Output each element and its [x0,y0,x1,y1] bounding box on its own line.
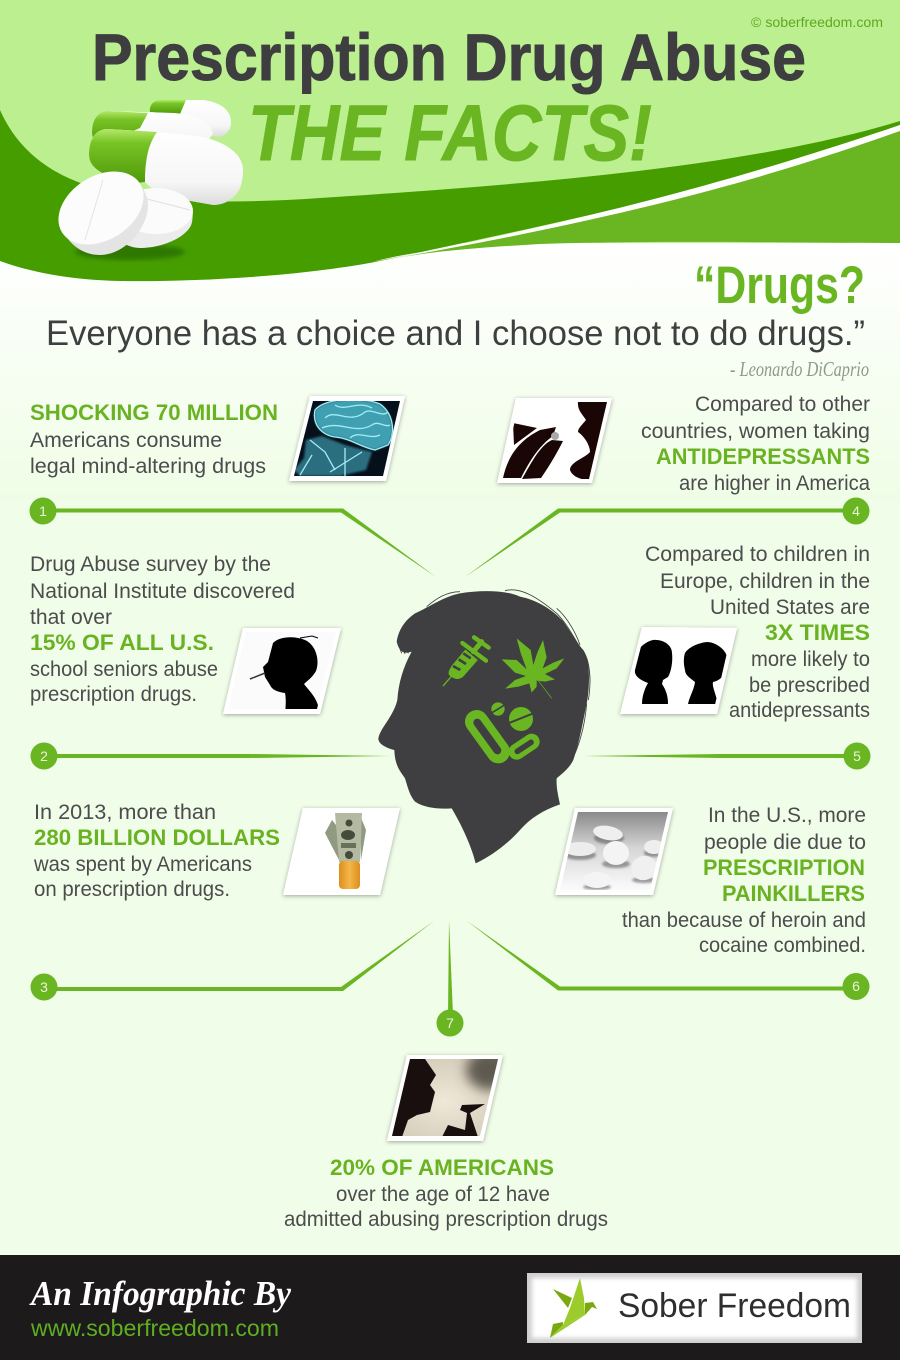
connector 1: 1 [39,503,47,519]
fact 2 text: 15% OF ALL U.S. [30,630,214,655]
fact 5 text: be prescribed [749,673,870,697]
fact 2 text: that over [30,605,112,629]
quote [46,256,869,381]
icon: capsules and tablets [477,702,533,752]
photo 2: teen smoking silhouette [223,628,343,715]
icon: pills [45,100,243,260]
fact 7 text: over the age of 12 have [336,1182,550,1206]
fact 4 text: ANTIDEPRESSANTS [656,444,870,469]
fact 3 text: 280 BILLION DOLLARS [34,825,280,850]
fact 5 text: 3X TIMES [765,620,870,645]
quote text: Everyone has a choice and I choose not to do drugs.” [46,314,865,353]
fact 7 text: 20% OF AMERICANS [330,1155,554,1180]
fact 1 text: legal mind-altering drugs [30,454,266,478]
connector 6: 6 [852,978,860,994]
connector 5: 5 [853,748,861,764]
icon: syringe [443,637,489,686]
connector 7 [436,920,464,1036]
fact 6 text: people die due to [704,830,866,854]
fact 1 text [30,400,278,478]
photo 5: children silhouettes [618,627,738,715]
fact 4 text: are higher in America [679,471,870,495]
connector 2: 2 [40,748,48,764]
footer heading: An Infographic By [29,1274,291,1313]
fact 4 text: countries, women taking [641,419,870,443]
connector 6 [467,921,870,1000]
tablets [75,188,193,260]
subtitle: the facts: THE FACTS! [248,88,652,177]
hair wisps [397,590,590,767]
fact 5 text [645,542,870,722]
connector 7: 7 [446,1015,454,1031]
fact 2 text [30,552,295,706]
fact 4 text: Compared to other [695,392,870,416]
fact 2 text: school seniors abuse [30,657,218,681]
fact 5 text: Compared to children in [645,542,870,566]
fact 6 text [622,803,866,957]
fact 5 text: antidepressants [729,698,870,722]
fact 7 text [284,1155,608,1231]
footer [0,1255,900,1360]
fact 1 text: Americans consume [30,428,222,452]
footer url: www.soberfreedom.com [30,1315,279,1341]
back capsule [150,100,231,137]
fact 5 text: United States are [710,595,870,619]
fact 6 text: PAINKILLERS [722,881,865,906]
connector 3: 3 [40,979,48,995]
head silhouette [378,590,590,863]
fact 6 text: than because of heroin and [622,908,866,932]
photo 1: x-ray brain [285,396,405,481]
fact 2 text: National Institute discovered [30,579,295,603]
photo 7: woman exhaling smoke [385,1050,514,1141]
fact 3 text: In 2013, more than [34,800,216,824]
logo box [527,1273,862,1343]
fact 5 text: more likely to [751,647,870,671]
quote heading: “Drugs? [694,256,865,315]
title: Prescription Drug Abuse [92,20,806,94]
photo 3: money in a pill bottle [280,808,400,895]
fact 3 text: was spent by Americans [33,852,252,876]
fact 7 text: admitted abusing prescription drugs [284,1207,608,1231]
fact 5 text: Europe, children in the [660,569,870,593]
copyright note: © soberfreedom.com [751,15,883,30]
fact 2 text: prescription drugs. [30,682,197,706]
fact 3 text: on prescription drugs. [34,877,230,901]
fact 4 text [641,392,870,495]
icon: leaf [502,638,564,698]
middle capsule [92,111,213,150]
connector lines [30,498,870,1036]
head shape [378,591,589,863]
fact 1 text: SHOCKING 70 MILLION [30,400,278,425]
connector 4 [465,498,870,577]
photo 4: woman taking a pill [495,398,615,483]
fact 6 text: cocaine combined. [699,933,866,957]
fact 6 text: PRESCRIPTION [703,855,865,880]
connector 3 [30,921,434,1000]
fact 3 text [33,800,280,901]
fact 2 text: Drug Abuse survey by the [30,552,271,576]
connector 2 [30,742,390,770]
fact 6 text: In the U.S., more [708,803,866,827]
connector 5 [583,742,870,770]
front capsule [89,129,243,205]
logo wordmark: Sober Freedom [618,1287,851,1325]
icon: bird logo [550,1278,597,1338]
connector 4: 4 [852,503,860,519]
connector 1 [30,498,436,577]
header banner [0,0,900,281]
photo 6: white pills [555,808,675,895]
